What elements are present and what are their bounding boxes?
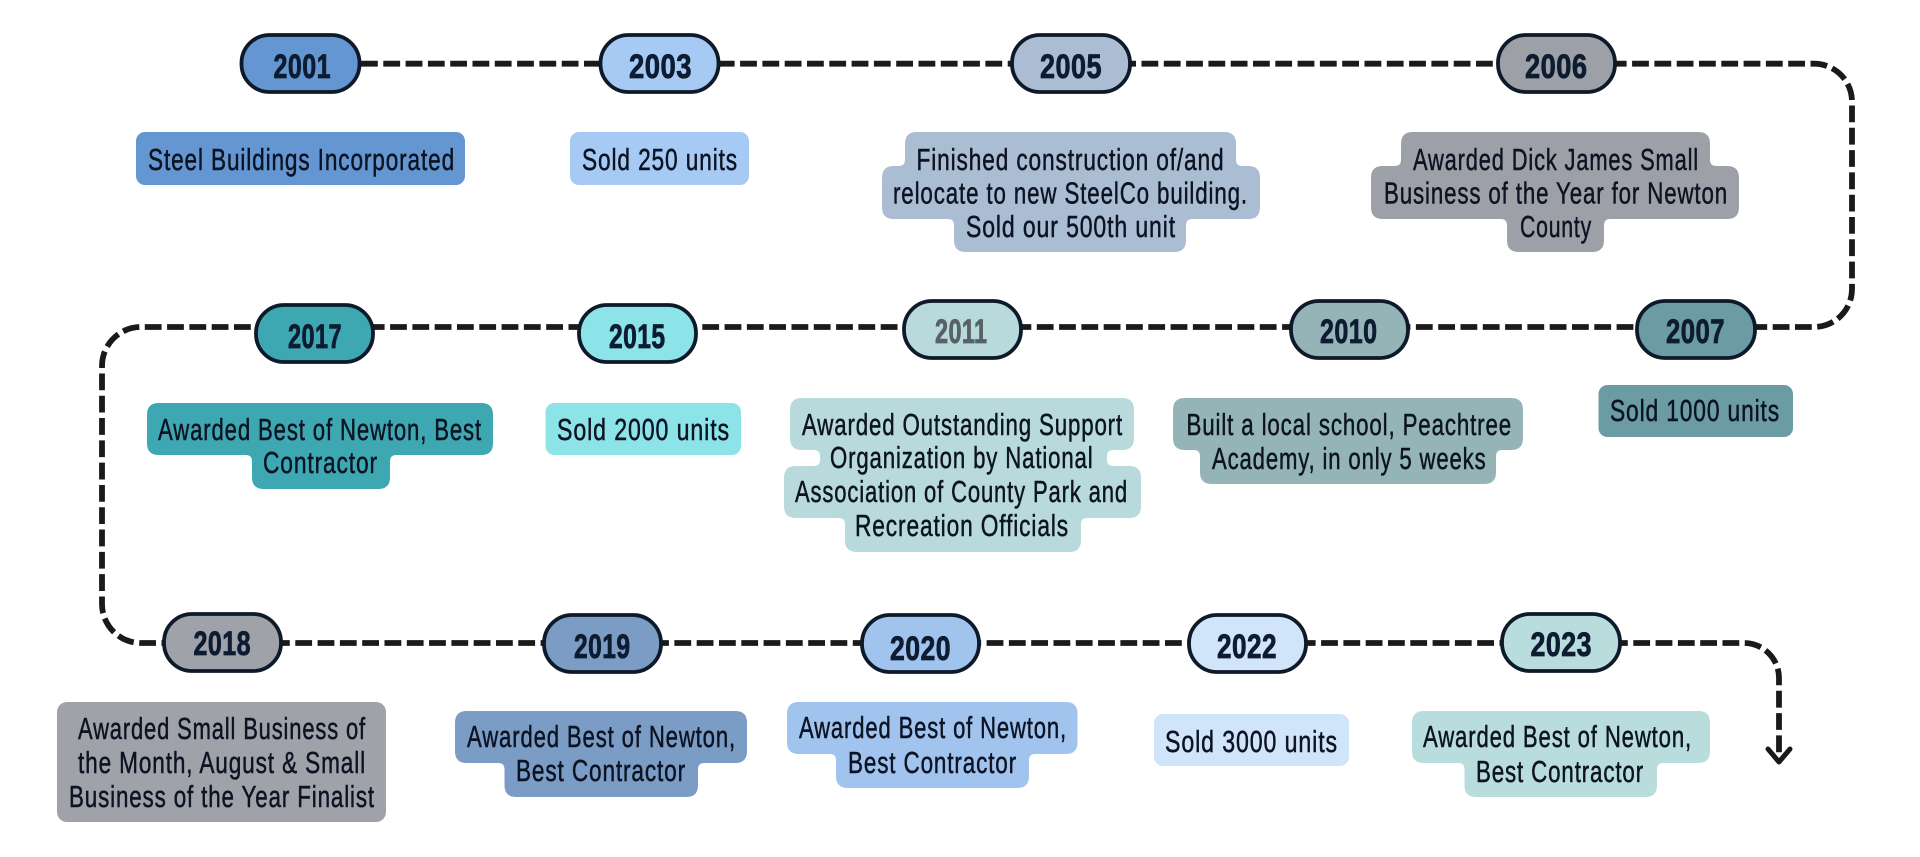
milestone: 2006: County (1520, 209, 1592, 244)
milestone: 2022: 2022 (1217, 628, 1277, 666)
milestone: 2011: Recreation Officials (855, 508, 1069, 543)
milestone: 2006: 2006 (1525, 48, 1588, 86)
milestone: 2010 (1173, 301, 1523, 484)
milestone: 2003: Sold 250 units (582, 142, 738, 177)
milestone: 2005: Finished construction of/and (916, 142, 1224, 177)
milestone: 2022: Sold 3000 units (1165, 724, 1338, 759)
milestone: 2011 (784, 301, 1141, 552)
milestone: 2003: 2003 (629, 48, 692, 86)
milestone: 2010: 2010 (1320, 313, 1378, 351)
milestone: 2001: Steel Buildings Incorporated (148, 142, 455, 177)
milestone: 2019: Awarded Best of Newton, (467, 719, 736, 754)
milestone: 2007: Sold 1000 units (1610, 393, 1780, 428)
milestone: 2006: Business of the Year for Newton (1384, 176, 1728, 210)
milestone: 2019: 2019 (574, 628, 630, 666)
milestone: 2017: 2017 (288, 318, 342, 356)
milestone: 2022 (1154, 615, 1349, 766)
milestone: 2015: Sold 2000 units (557, 412, 730, 447)
milestone: 2011: Awarded Outstanding Support (802, 407, 1123, 442)
milestone: 2015: 2015 (609, 318, 666, 356)
milestone: 2020: Best Contractor (848, 745, 1017, 780)
milestone: 2007: 2007 (1666, 313, 1725, 351)
milestone: 2011: 2011 (935, 313, 988, 351)
milestone: 2005: Sold our 500th unit (966, 209, 1176, 244)
dashed timeline path (102, 64, 1852, 757)
milestone: 2023 (1412, 614, 1710, 797)
milestone: 2020 (787, 615, 1078, 788)
milestone: 2023: Awarded Best of Newton, (1423, 719, 1692, 754)
milestone: 2017: Awarded Best of Newton, Best (158, 412, 482, 447)
milestone: 2005 (882, 35, 1260, 252)
milestone: 2019: Best Contractor (516, 753, 686, 788)
milestone: 2006 (1371, 35, 1739, 252)
milestone: 2018: Business of the Year Finalist (69, 779, 375, 814)
milestone: 2023: 2023 (1530, 626, 1592, 664)
milestone: 2015 (546, 305, 741, 455)
milestone: 2017: Contractor (263, 445, 378, 480)
milestone: 2020: Awarded Best of Newton, (799, 710, 1067, 745)
milestone: 2005: relocate to new SteelCo building. (893, 176, 1248, 210)
icon: arrow head (1768, 749, 1790, 762)
milestone: 2006: Awarded Dick James Small (1413, 142, 1699, 177)
milestone: 2001: 2001 (274, 48, 331, 86)
milestone: 2007 (1598, 301, 1793, 437)
milestone: 2019 (455, 615, 747, 797)
milestone: 2011: Association of County Park and (795, 474, 1128, 509)
milestone: 2020: 2020 (890, 630, 951, 668)
milestone: 2018: 2018 (194, 625, 251, 663)
milestone: 2023: Best Contractor (1476, 754, 1644, 789)
milestone: 2011: Organization by National (830, 440, 1094, 475)
milestone: 2001 (136, 35, 465, 185)
milestone: 2018: Awarded Small Business of (78, 711, 366, 746)
milestone: 2018 (57, 614, 386, 822)
milestone: 2017 (147, 305, 493, 489)
milestone: 2018: the Month, August & Small (78, 745, 366, 780)
milestone: 2003 (570, 35, 749, 185)
milestone: 2005: 2005 (1040, 48, 1102, 86)
milestone: 2010: Built a local school, Peachtree (1186, 407, 1512, 442)
milestone: 2010: Academy, in only 5 weeks (1212, 441, 1486, 476)
